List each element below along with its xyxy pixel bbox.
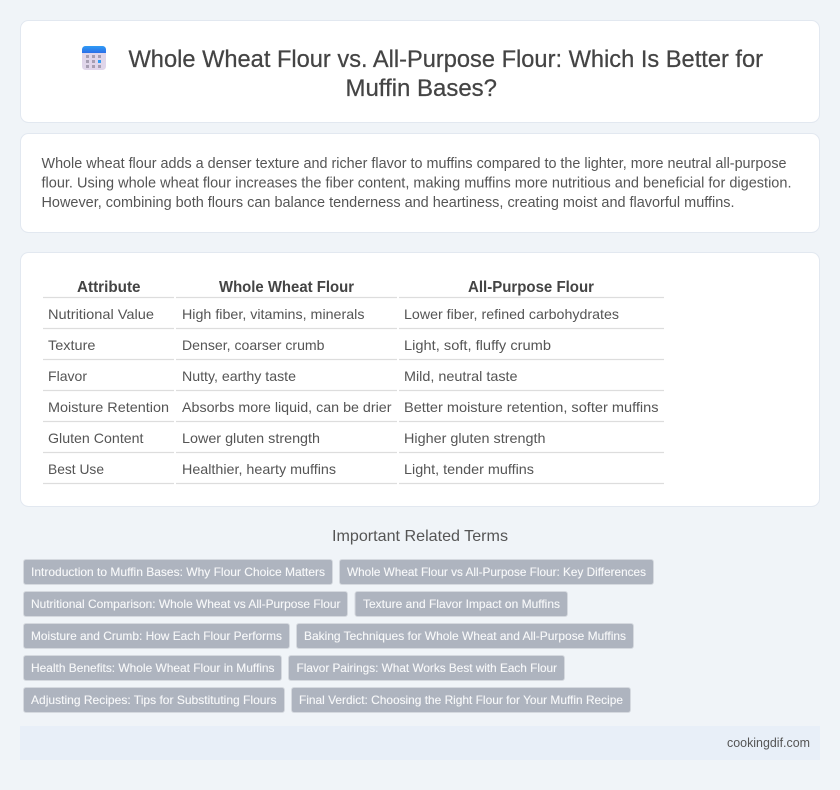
row: nutritional value: Nutritional Value (48, 306, 154, 322)
row: gluten content (48, 430, 546, 446)
tag (288, 656, 564, 680)
icon: calendar (82, 46, 106, 70)
row: flavor: Nutty, earthy taste (182, 368, 296, 384)
tag: Baking Techniques for Whole Wheat and All-Purpose Muffins (304, 629, 626, 643)
title: Whole Wheat Flour vs. All-Purpose Flour: Which Is Better for (128, 46, 763, 73)
row: moisture retention (48, 399, 658, 415)
footer (20, 726, 820, 760)
panel: comparison table (20, 252, 820, 506)
table header: All-Purpose Flour (468, 279, 594, 296)
row: nutritional value: High fiber, vitamins, minerals (182, 306, 364, 322)
row: nutritional value (48, 306, 619, 322)
row: moisture retention: Moisture Retention (48, 399, 169, 415)
text block: introduction: Whole wheat flour adds a denser texture and richer flavor to muffins compared to the lighter, more neutral all-purpose (42, 156, 786, 172)
row: texture (48, 337, 551, 353)
tag (296, 624, 634, 648)
tag: Moisture and Crumb: How Each Flour Performs (31, 629, 282, 643)
tag: Texture and Flavor Impact on Muffins (363, 597, 560, 611)
tag: Flavor Pairings: What Works Best with Each Flour (296, 661, 557, 675)
row: texture: Light, soft, fluffy crumb (404, 337, 551, 353)
heading: related terms: Important Related Terms (332, 528, 508, 545)
row: flavor: Mild, neutral taste (404, 368, 518, 384)
tag: Nutritional Comparison: Whole Wheat vs All-Purpose Flour (31, 597, 340, 611)
tag (24, 560, 332, 584)
tag (24, 656, 282, 680)
footer: cookingdif.com (727, 736, 810, 750)
row: flavor (48, 368, 518, 384)
tag: Whole Wheat Flour vs All-Purpose Flour: Key Differences (347, 565, 646, 579)
text block: introduction: flour. Using whole wheat flour increases the fiber content, making muffins more nutritious and beneficial for digestion. (42, 176, 792, 192)
table header (77, 279, 594, 296)
row: best use: Best Use (48, 461, 104, 477)
text block: introduction: However, combining both flours can balance tenderness and heartiness, creating moist and flavorful muffins. (42, 195, 734, 211)
row: flavor: Flavor (48, 368, 87, 384)
text block: introduction (42, 156, 792, 211)
tag (24, 688, 284, 712)
row: texture: Texture (48, 337, 96, 353)
row: moisture retention: Absorbs more liquid, can be drier (182, 399, 392, 415)
table header: Attribute (77, 279, 141, 296)
tag (24, 592, 348, 616)
row: best use: Healthier, hearty muffins (182, 461, 336, 477)
row: best use: Light, tender muffins (404, 461, 534, 477)
tag (340, 560, 654, 584)
tag (292, 688, 630, 712)
table header: Whole Wheat Flour (219, 279, 354, 296)
panel: header (20, 20, 820, 122)
row: gluten content: Higher gluten strength (404, 430, 546, 446)
tag: Introduction to Muffin Bases: Why Flour Choice Matters (31, 565, 325, 579)
tag (355, 592, 568, 616)
row: gluten content: Lower gluten strength (182, 430, 320, 446)
title: Muffin Bases? (346, 75, 497, 102)
row: gluten content: Gluten Content (48, 430, 144, 446)
tag: Final Verdict: Choosing the Right Flour for Your Muffin Recipe (299, 693, 623, 707)
tag group: related terms (24, 560, 654, 712)
panel: introduction (20, 134, 820, 232)
row: nutritional value: Lower fiber, refined carbohydrates (404, 306, 619, 322)
title (128, 46, 763, 102)
row: moisture retention: Better moisture retention, softer muffins (404, 399, 658, 415)
row: texture: Denser, coarser crumb (182, 337, 325, 353)
tag (24, 624, 290, 648)
tag: Health Benefits: Whole Wheat Flour in Muffins (31, 661, 274, 675)
tag: Adjusting Recipes: Tips for Substituting Flours (31, 693, 276, 707)
row: best use (48, 461, 534, 477)
